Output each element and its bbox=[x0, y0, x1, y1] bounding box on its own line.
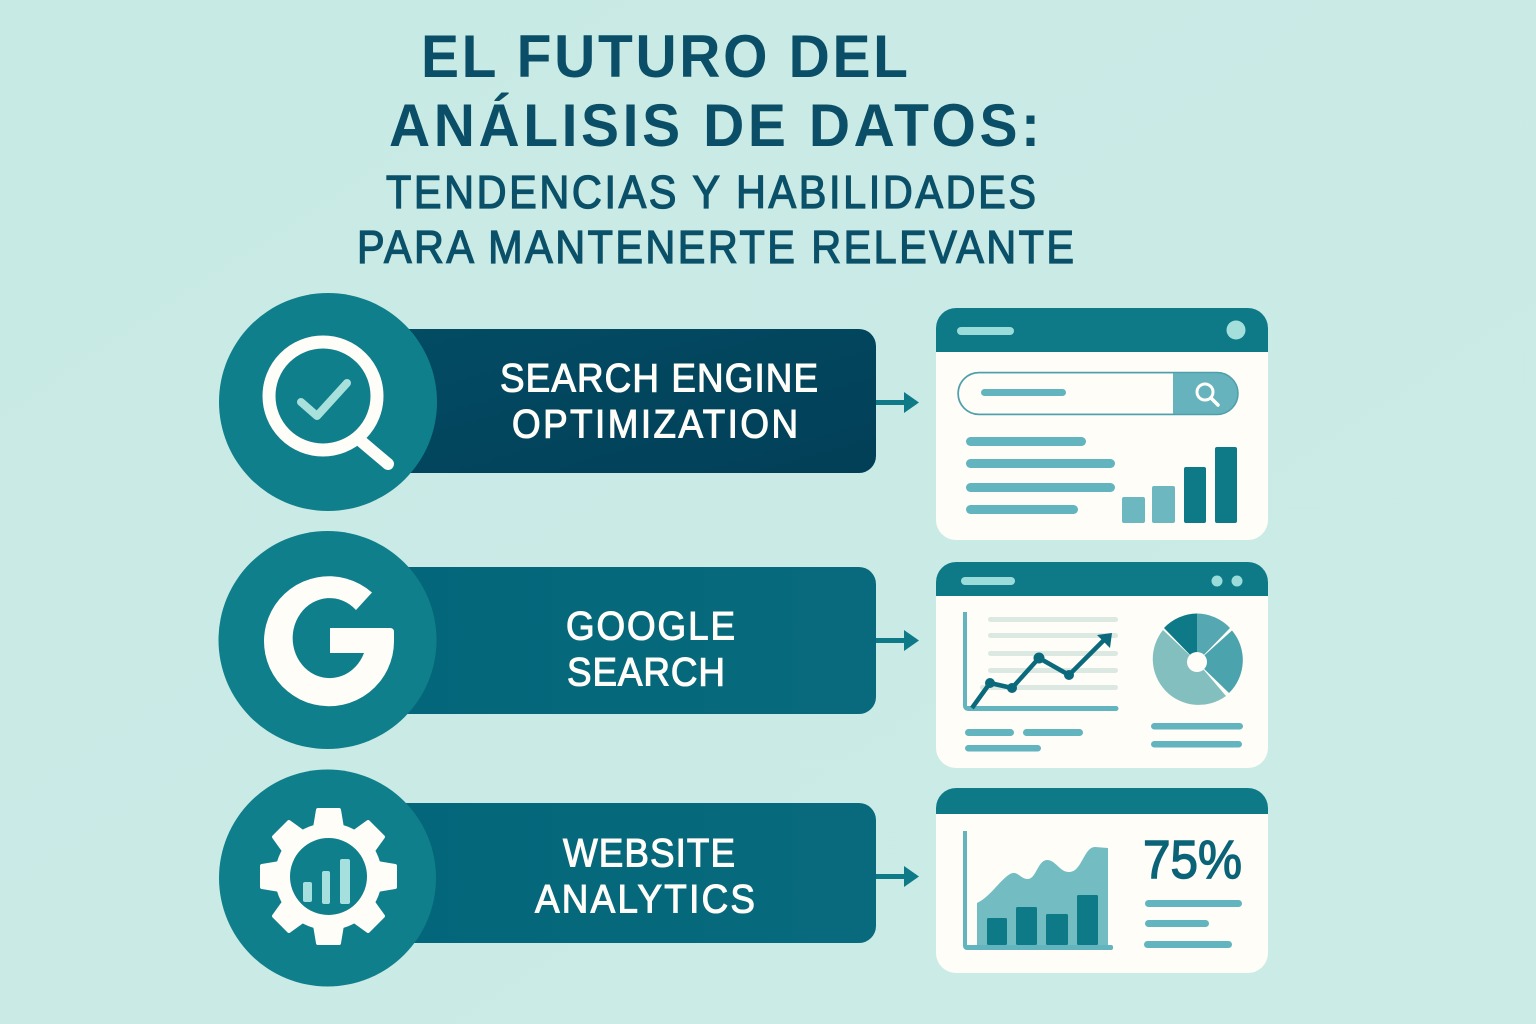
banner: website analytics bbox=[380, 803, 876, 943]
area and bar chart bbox=[963, 831, 1113, 950]
panel: analytics window bbox=[936, 788, 1268, 973]
banner: google search: GOOGLE bbox=[566, 604, 735, 649]
banner: google search bbox=[380, 567, 876, 714]
banner: website analytics: WEBSITE bbox=[563, 831, 735, 876]
text lines bbox=[965, 723, 1243, 752]
arrow bbox=[876, 392, 919, 413]
banner: search engine optimization bbox=[380, 329, 876, 473]
row: website analytics bbox=[219, 770, 1268, 986]
search bar bbox=[958, 372, 1238, 414]
subtitle: PARA MANTENERTE RELEVANTE bbox=[357, 222, 1074, 274]
pie chart bbox=[1153, 614, 1243, 705]
icon: gear with bars bbox=[219, 770, 436, 986]
stat: 75%: 75% bbox=[1143, 830, 1242, 890]
text lines bbox=[966, 437, 1115, 514]
icon: magnifier with check bbox=[219, 293, 437, 511]
arrow bbox=[876, 630, 919, 651]
title bbox=[389, 24, 1040, 159]
icon: letter G bbox=[218, 531, 436, 749]
title: EL FUTURO DEL bbox=[421, 24, 908, 90]
row: search engine optimization bbox=[219, 293, 1268, 540]
banner: search engine optimization: OPTIMIZATION bbox=[512, 402, 798, 447]
subtitle: TENDENCIAS Y HABILIDADES bbox=[386, 167, 1036, 219]
banner: google search: SEARCH bbox=[567, 650, 725, 695]
line chart bbox=[963, 612, 1118, 711]
arrow bbox=[876, 866, 919, 887]
banner: website analytics: ANALYTICS bbox=[535, 877, 755, 922]
text lines bbox=[1144, 900, 1242, 948]
panel: line and pie chart window bbox=[936, 562, 1268, 768]
title: ANÁLISIS DE DATOS: bbox=[389, 92, 1040, 159]
banner: search engine optimization: SEARCH ENGINE bbox=[500, 356, 818, 401]
bar chart bbox=[1122, 447, 1237, 523]
row: google search bbox=[218, 531, 1268, 768]
panel: search results window bbox=[936, 308, 1268, 540]
subtitle bbox=[357, 167, 1074, 274]
